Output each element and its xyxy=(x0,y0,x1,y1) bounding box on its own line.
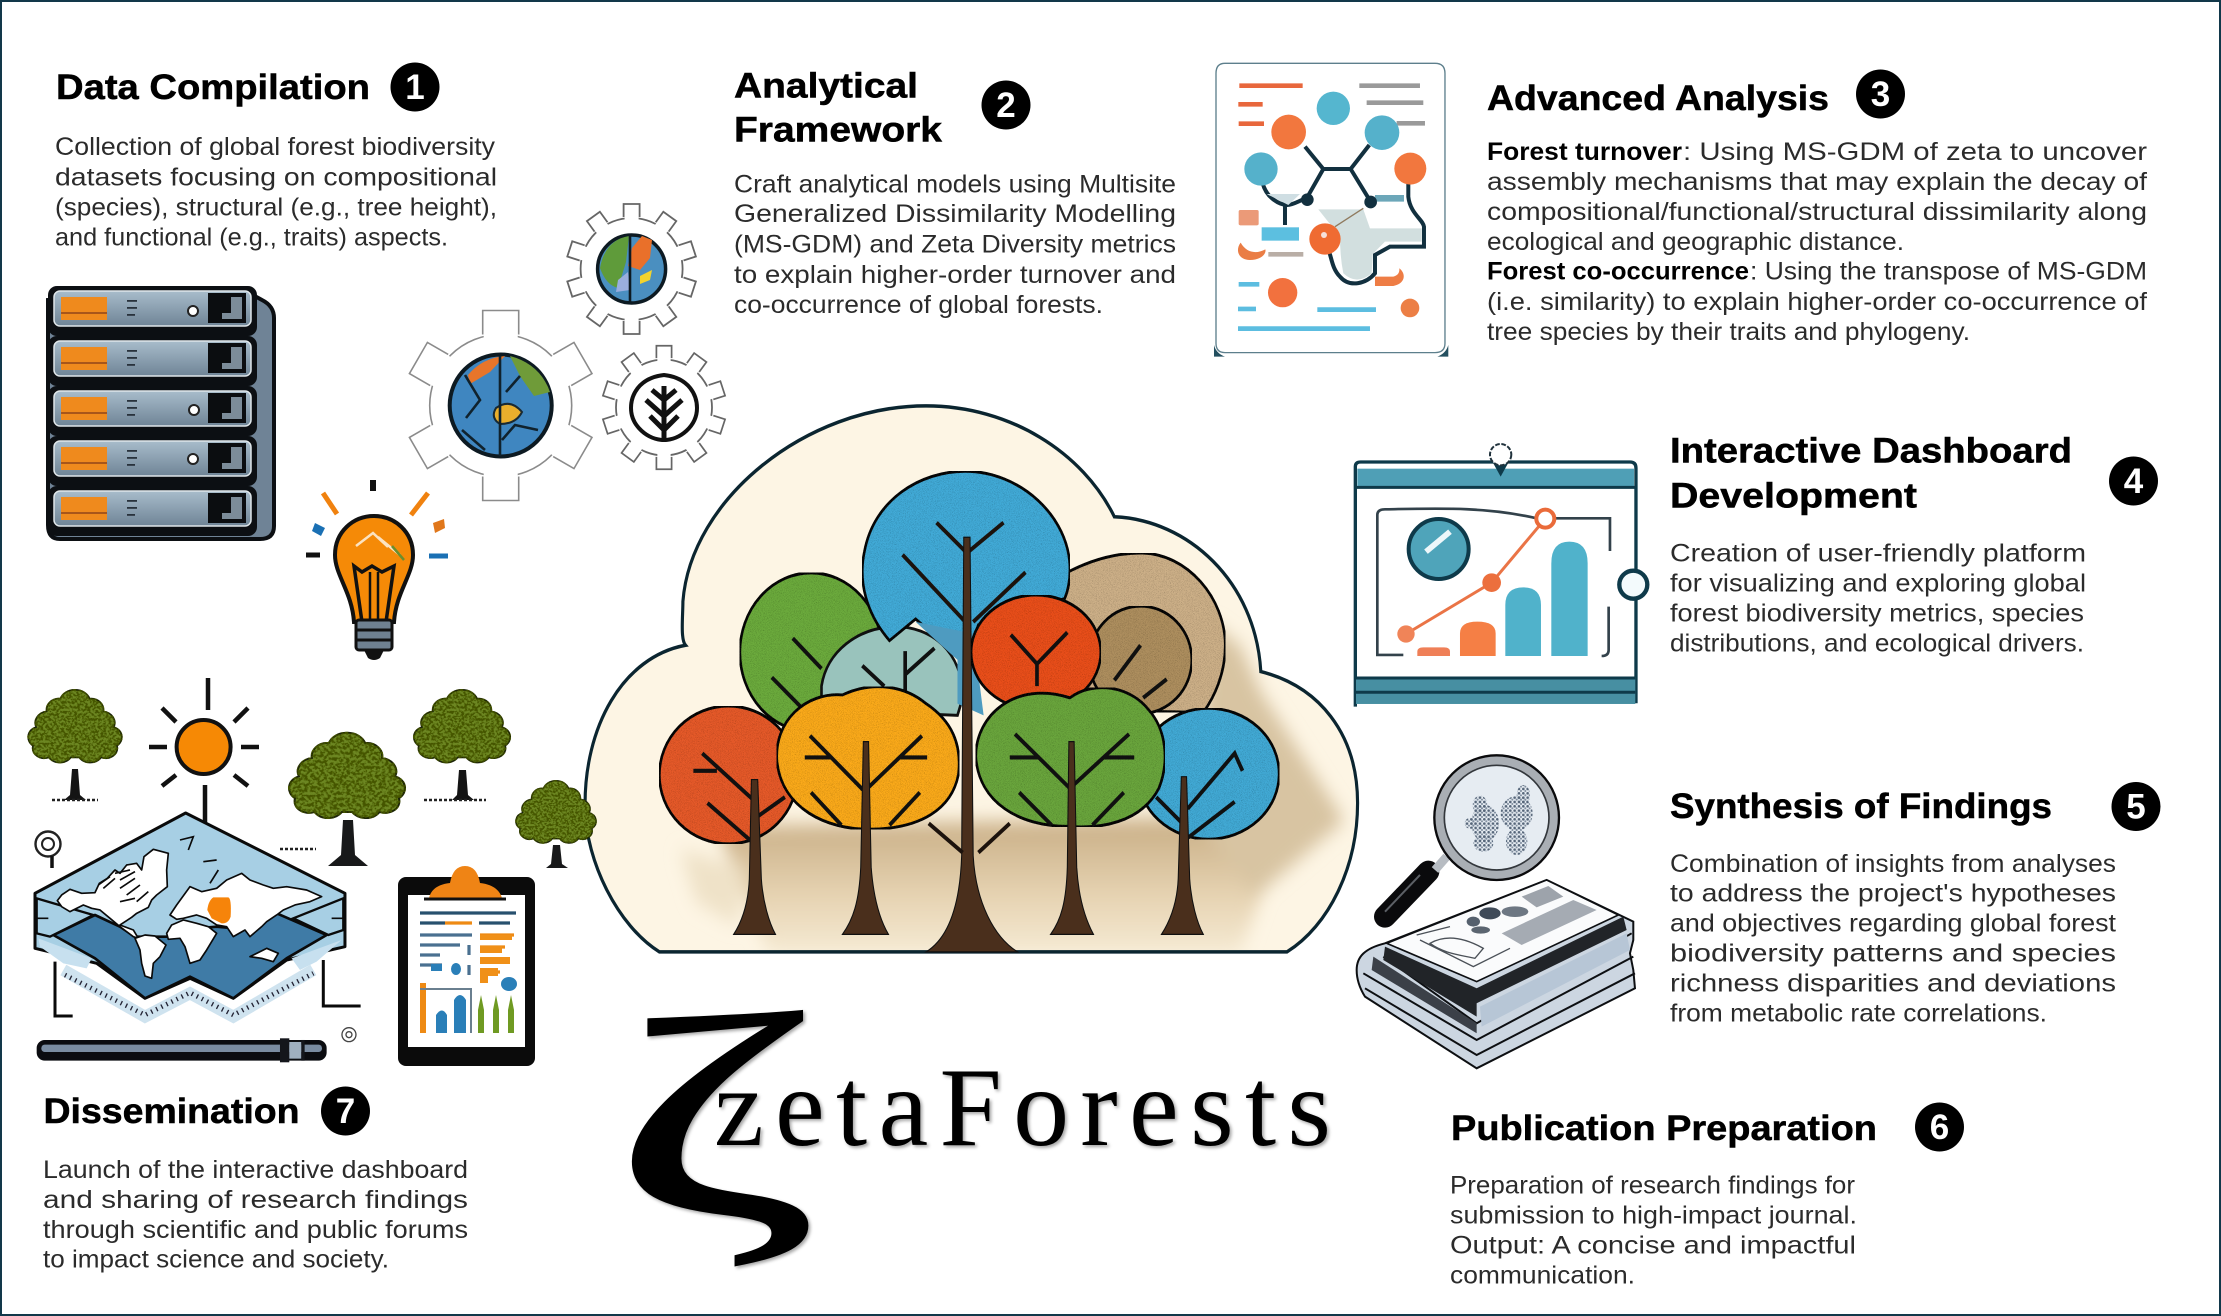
text block: Dissemination xyxy=(43,1156,468,1274)
text block: Synthesis of Findings: and objectives regarding global forest xyxy=(1670,910,2116,938)
text block: Synthesis of Findings: richness disparities and deviations xyxy=(1670,970,2116,998)
icon: isometric world map xyxy=(35,813,361,1062)
text block: Advanced Analysis: : Using the transpose of MS-GDM xyxy=(1750,258,2147,286)
continents xyxy=(57,849,322,978)
number badge 3 xyxy=(1856,70,1905,118)
paper xyxy=(408,895,525,1047)
tree: green front canopy xyxy=(976,688,1165,827)
legs xyxy=(55,960,361,1016)
tree: central trunk xyxy=(926,537,1018,952)
small circle marker xyxy=(342,1028,356,1042)
icon: light bulb xyxy=(306,480,448,660)
logo: zetaForests wordmark: zetaForests xyxy=(714,1046,1331,1170)
heading: Data Compilation xyxy=(56,68,370,107)
text block: Advanced Analysis: compositional/functional/structural dissimilarity along xyxy=(1487,198,2147,226)
title bar xyxy=(1357,469,1634,486)
number badge 2 xyxy=(982,80,1030,130)
map slab xyxy=(35,813,345,998)
text block: Publication Preparation: submission to high-impact journal. xyxy=(1450,1202,1857,1230)
number badge 5: 5 xyxy=(2126,788,2146,826)
icon: large gear with globe xyxy=(405,306,596,506)
icon: magnifier and books xyxy=(1357,755,1635,1068)
page content xyxy=(1417,927,1510,967)
text block: Synthesis of Findings: from metabolic rate correlations. xyxy=(1670,1000,2047,1028)
tree: red left canopy xyxy=(659,706,797,844)
map region xyxy=(1318,209,1422,280)
text block: Publication Preparation: Preparation of research findings for xyxy=(1450,1172,1855,1200)
text block: Data Compilation xyxy=(55,133,497,252)
text block: Advanced Analysis: Forest co-occurrence xyxy=(1487,258,1749,286)
text block: Interactive Dashboard: for visualizing and exploring global xyxy=(1670,570,2086,598)
number badge 6: 6 xyxy=(1930,1108,1949,1147)
bars xyxy=(1417,647,1450,656)
island scribbles xyxy=(98,837,218,902)
heading: Framework xyxy=(734,110,943,150)
icon: tree beside cloud xyxy=(516,781,596,868)
text block: Analytical Framework: (MS-GDM) and Zeta Diversity metrics xyxy=(734,230,1176,258)
tree: green back canopy xyxy=(740,573,882,732)
text block: Dissemination: through scientific and public forums xyxy=(43,1216,468,1244)
heading: Advanced Analysis xyxy=(1487,79,1829,118)
text block: Advanced Analysis xyxy=(1487,138,2147,346)
lens xyxy=(1434,755,1559,880)
heading: Dissemination xyxy=(44,1092,300,1131)
heading: Analytical xyxy=(734,66,918,106)
report blocks xyxy=(480,935,512,940)
text block: Analytical Framework: Generalized Dissimilarity Modelling xyxy=(734,200,1176,228)
icon: gear with leaf xyxy=(601,344,727,471)
number badge 3: 3 xyxy=(1871,75,1890,114)
text block: Data Compilation: Collection of global forest biodiversity xyxy=(55,133,496,161)
nodes xyxy=(1317,92,1350,125)
text block: Advanced Analysis: Forest turnover xyxy=(1487,138,1682,166)
handle xyxy=(1385,872,1428,917)
cloud xyxy=(585,406,1358,952)
icon: dashboard screen xyxy=(1355,444,1647,707)
text lines xyxy=(1238,86,1425,329)
tree: pale teal canopy xyxy=(822,627,963,715)
number badge 2: 2 xyxy=(996,86,1016,125)
number badge 7: 7 xyxy=(336,1092,355,1131)
highlighted region xyxy=(207,897,231,923)
number badge 7 xyxy=(321,1086,370,1136)
text block: Advanced Analysis: tree species by their traits and phylogeny. xyxy=(1487,318,1970,346)
icon: tree top-right xyxy=(414,690,510,800)
trend line xyxy=(1406,519,1545,634)
text block: Synthesis of Findings xyxy=(1670,850,2116,1028)
text block: Advanced Analysis: ecological and geographic distance. xyxy=(1487,228,1904,256)
text block: Interactive Dashboard: forest biodiversity metrics, species xyxy=(1670,600,2084,628)
text block: Synthesis of Findings: biodiversity patterns and species xyxy=(1670,940,2116,968)
network xyxy=(1263,145,1424,283)
heading group: Dissemination xyxy=(44,1086,370,1136)
books xyxy=(1357,880,1635,1068)
heading xyxy=(1670,432,2072,516)
text block: Publication Preparation: Output: A concise and impactful xyxy=(1450,1232,1856,1260)
chart frame xyxy=(1377,509,1610,656)
specimen dots xyxy=(1465,785,1533,855)
number badge 1: 1 xyxy=(405,68,425,107)
text block: Publication Preparation xyxy=(1450,1172,1857,1290)
tree: blue right canopy xyxy=(1138,708,1279,839)
tree: orange canopy xyxy=(777,687,959,829)
icon: sun xyxy=(149,678,259,830)
icon: analysis card xyxy=(1214,63,1448,357)
number badge 1 xyxy=(390,62,440,112)
icon: tree top-left xyxy=(28,690,122,800)
dotted base xyxy=(63,970,313,1017)
icon: map pin xyxy=(36,832,60,868)
heading: Synthesis of Findings xyxy=(1670,787,2052,826)
text block: Synthesis of Findings: to address the project's hypotheses xyxy=(1670,880,2116,908)
footer bars xyxy=(1356,677,1635,704)
number badge 4 xyxy=(2109,456,2158,506)
text block: Analytical Framework: to explain higher-order turnover and xyxy=(734,261,1176,289)
side knob xyxy=(1619,571,1647,599)
ocean xyxy=(53,913,327,998)
icon: clipboard report xyxy=(398,866,535,1066)
text block: Interactive Dashboard xyxy=(1670,540,2086,658)
ground shadow xyxy=(680,622,1344,955)
text block: Advanced Analysis: (i.e. similarity) to explain higher-order co-occurrence of xyxy=(1487,288,2147,316)
text block: Publication Preparation: communication. xyxy=(1450,1262,1635,1290)
heading group: Data Compilation xyxy=(56,62,440,112)
text block: Advanced Analysis: assembly mechanisms that may explain the decay of xyxy=(1487,168,2147,196)
text block: Synthesis of Findings: Combination of insights from analyses xyxy=(1670,850,2116,878)
central illustration: cloud with trees xyxy=(585,406,1358,955)
text block: Data Compilation: and functional (e.g., traits) aspects. xyxy=(55,224,448,252)
text block: Data Compilation: datasets focusing on compositional xyxy=(55,164,497,192)
heading group: Analytical Framework xyxy=(734,66,1030,150)
text block: Analytical Framework xyxy=(734,170,1176,319)
board xyxy=(398,877,535,1066)
icon: server rack xyxy=(48,286,274,539)
text block: Analytical Framework: Craft analytical models using Multisite xyxy=(734,170,1176,198)
text block: Data Compilation: (species), structural (e.g., tree height), xyxy=(55,194,497,222)
text block: Advanced Analysis: : Using MS-GDM of zeta to uncover xyxy=(1683,138,2147,166)
number badge 4: 4 xyxy=(2124,462,2144,501)
icon: tree centre xyxy=(280,733,405,866)
heading: Interactive Dashboard xyxy=(1670,432,2072,470)
text block: Dissemination: to impact science and society. xyxy=(43,1246,389,1274)
gauge circle xyxy=(1409,519,1469,579)
pin top xyxy=(1490,444,1511,477)
tree: red centre canopy xyxy=(971,595,1101,710)
tree: big blue canopy xyxy=(862,471,1070,663)
pen xyxy=(37,1038,327,1062)
text block: Interactive Dashboard: Creation of user-friendly platform xyxy=(1670,540,2086,568)
logo: zeta symbol: ζ xyxy=(612,957,818,1277)
text block: Analytical Framework: co-occurrence of global forests. xyxy=(734,291,1103,319)
card frame xyxy=(1216,63,1445,353)
heading group: Interactive Dashboard Development xyxy=(1670,432,2158,516)
heading xyxy=(734,66,943,150)
heading group: Synthesis of Findings xyxy=(1670,782,2160,831)
number badge 5 xyxy=(2112,782,2160,831)
icon: small gear with globe xyxy=(565,202,698,336)
text block: Dissemination: Launch of the interactive dashboard xyxy=(43,1156,468,1184)
number badge 6 xyxy=(1915,1102,1964,1152)
frame xyxy=(1355,462,1636,707)
text block: Interactive Dashboard: distributions, and ecological drivers. xyxy=(1670,630,2084,658)
heading group: Advanced Analysis xyxy=(1487,70,1905,118)
report lines xyxy=(420,913,516,975)
tree: brown back canopy xyxy=(1062,553,1225,712)
clip xyxy=(429,866,502,898)
text block: Dissemination: and sharing of research findings xyxy=(43,1186,468,1214)
heading: Development xyxy=(1670,476,1917,516)
heading group: Publication Preparation xyxy=(1451,1102,1964,1152)
heading: Publication Preparation xyxy=(1451,1109,1877,1148)
